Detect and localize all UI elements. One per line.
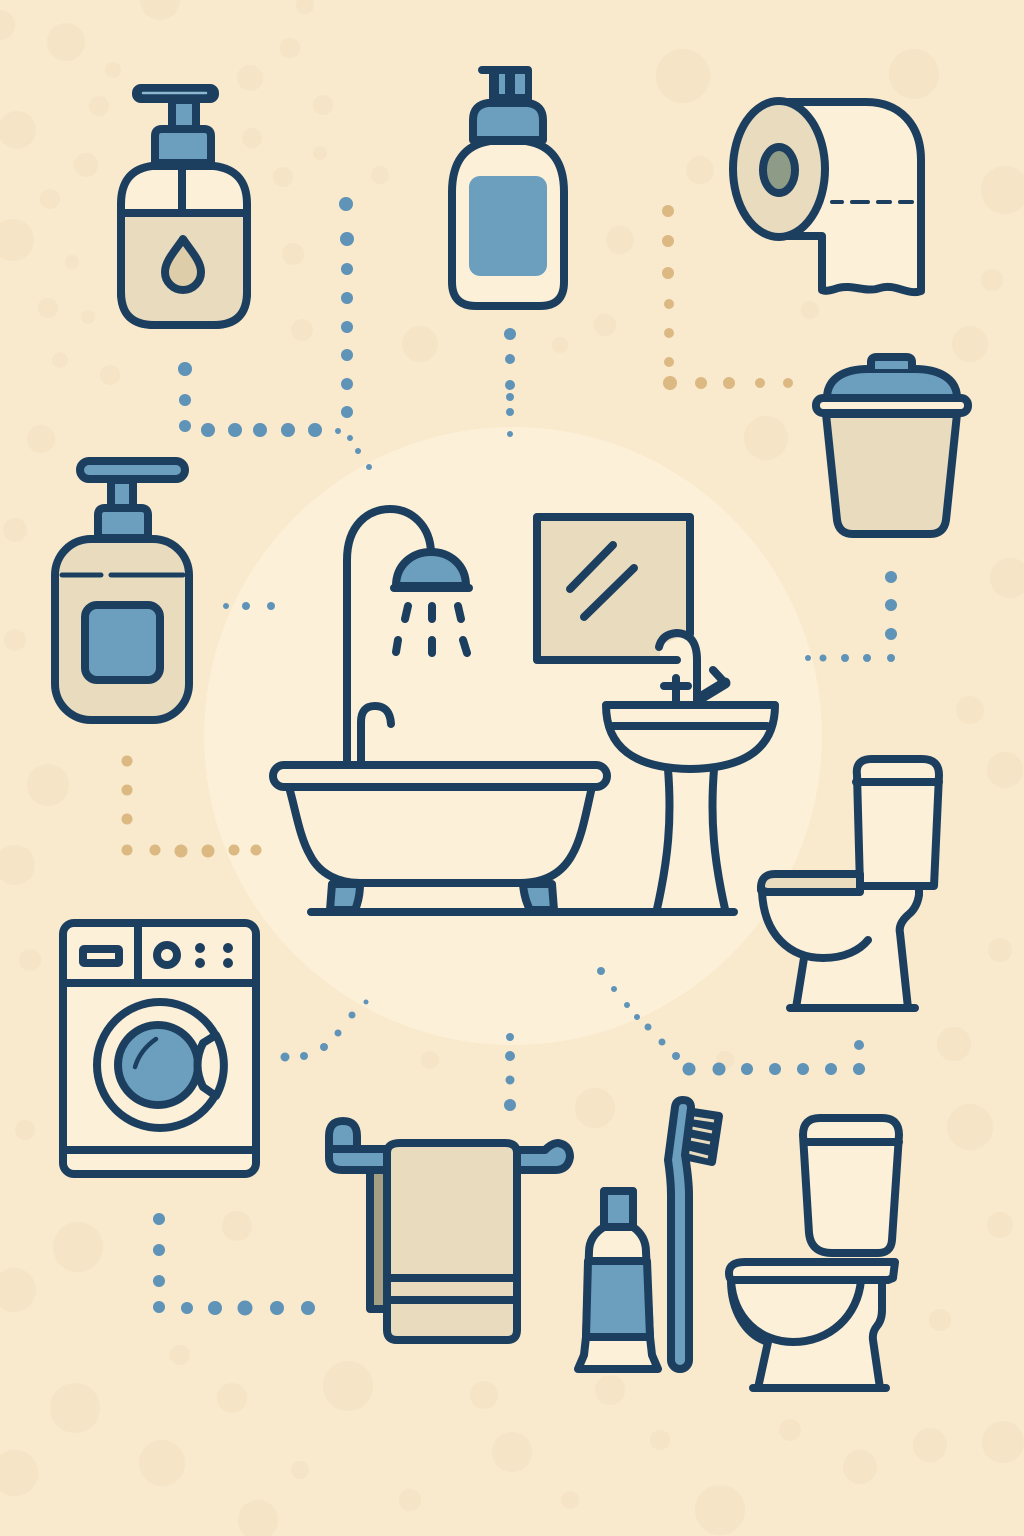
- connector dots: tan top-right: [662, 205, 793, 390]
- pump head: [482, 70, 528, 104]
- collar: [473, 103, 543, 140]
- icon: soap dispenser with square label: [55, 461, 189, 720]
- connector dots: bottle to centre: [504, 328, 516, 437]
- icon: trash bin: [816, 357, 968, 534]
- connector dots: washer to centre: [280, 1000, 368, 1062]
- central glow circle: [204, 427, 822, 1045]
- icon: toothbrush: [668, 1100, 719, 1369]
- icon: soap dispenser with drop: [121, 88, 247, 325]
- icon: toilet paper roll: [733, 101, 921, 292]
- icon: bathtub: [273, 706, 607, 910]
- icon: shower: [347, 509, 469, 765]
- connector dots: left soap to centre: [223, 602, 275, 610]
- icon: toilet bottom: [729, 1118, 899, 1388]
- icon: mirror: [537, 517, 690, 660]
- connector dots: towel to centre: [504, 1033, 516, 1111]
- icon: washing machine: [63, 923, 256, 1174]
- connector dots: trash to centre: [805, 571, 897, 662]
- icon: bottle with blue label: [452, 70, 564, 306]
- connector dots: lower right: [597, 967, 865, 1076]
- blue label: [469, 176, 547, 276]
- bottle body: [452, 141, 564, 306]
- icon: towel on rail: [329, 1121, 570, 1340]
- icon: toothpaste tube: [578, 1191, 658, 1369]
- connector dots: bottom left: [153, 1213, 315, 1316]
- connector dots: tan left: [122, 756, 262, 858]
- icon: toilet right: [761, 759, 939, 1008]
- icon: pedestal sink with faucet: [606, 633, 775, 909]
- connector dots: blue top-left: [178, 197, 372, 470]
- floor line: [311, 908, 734, 916]
